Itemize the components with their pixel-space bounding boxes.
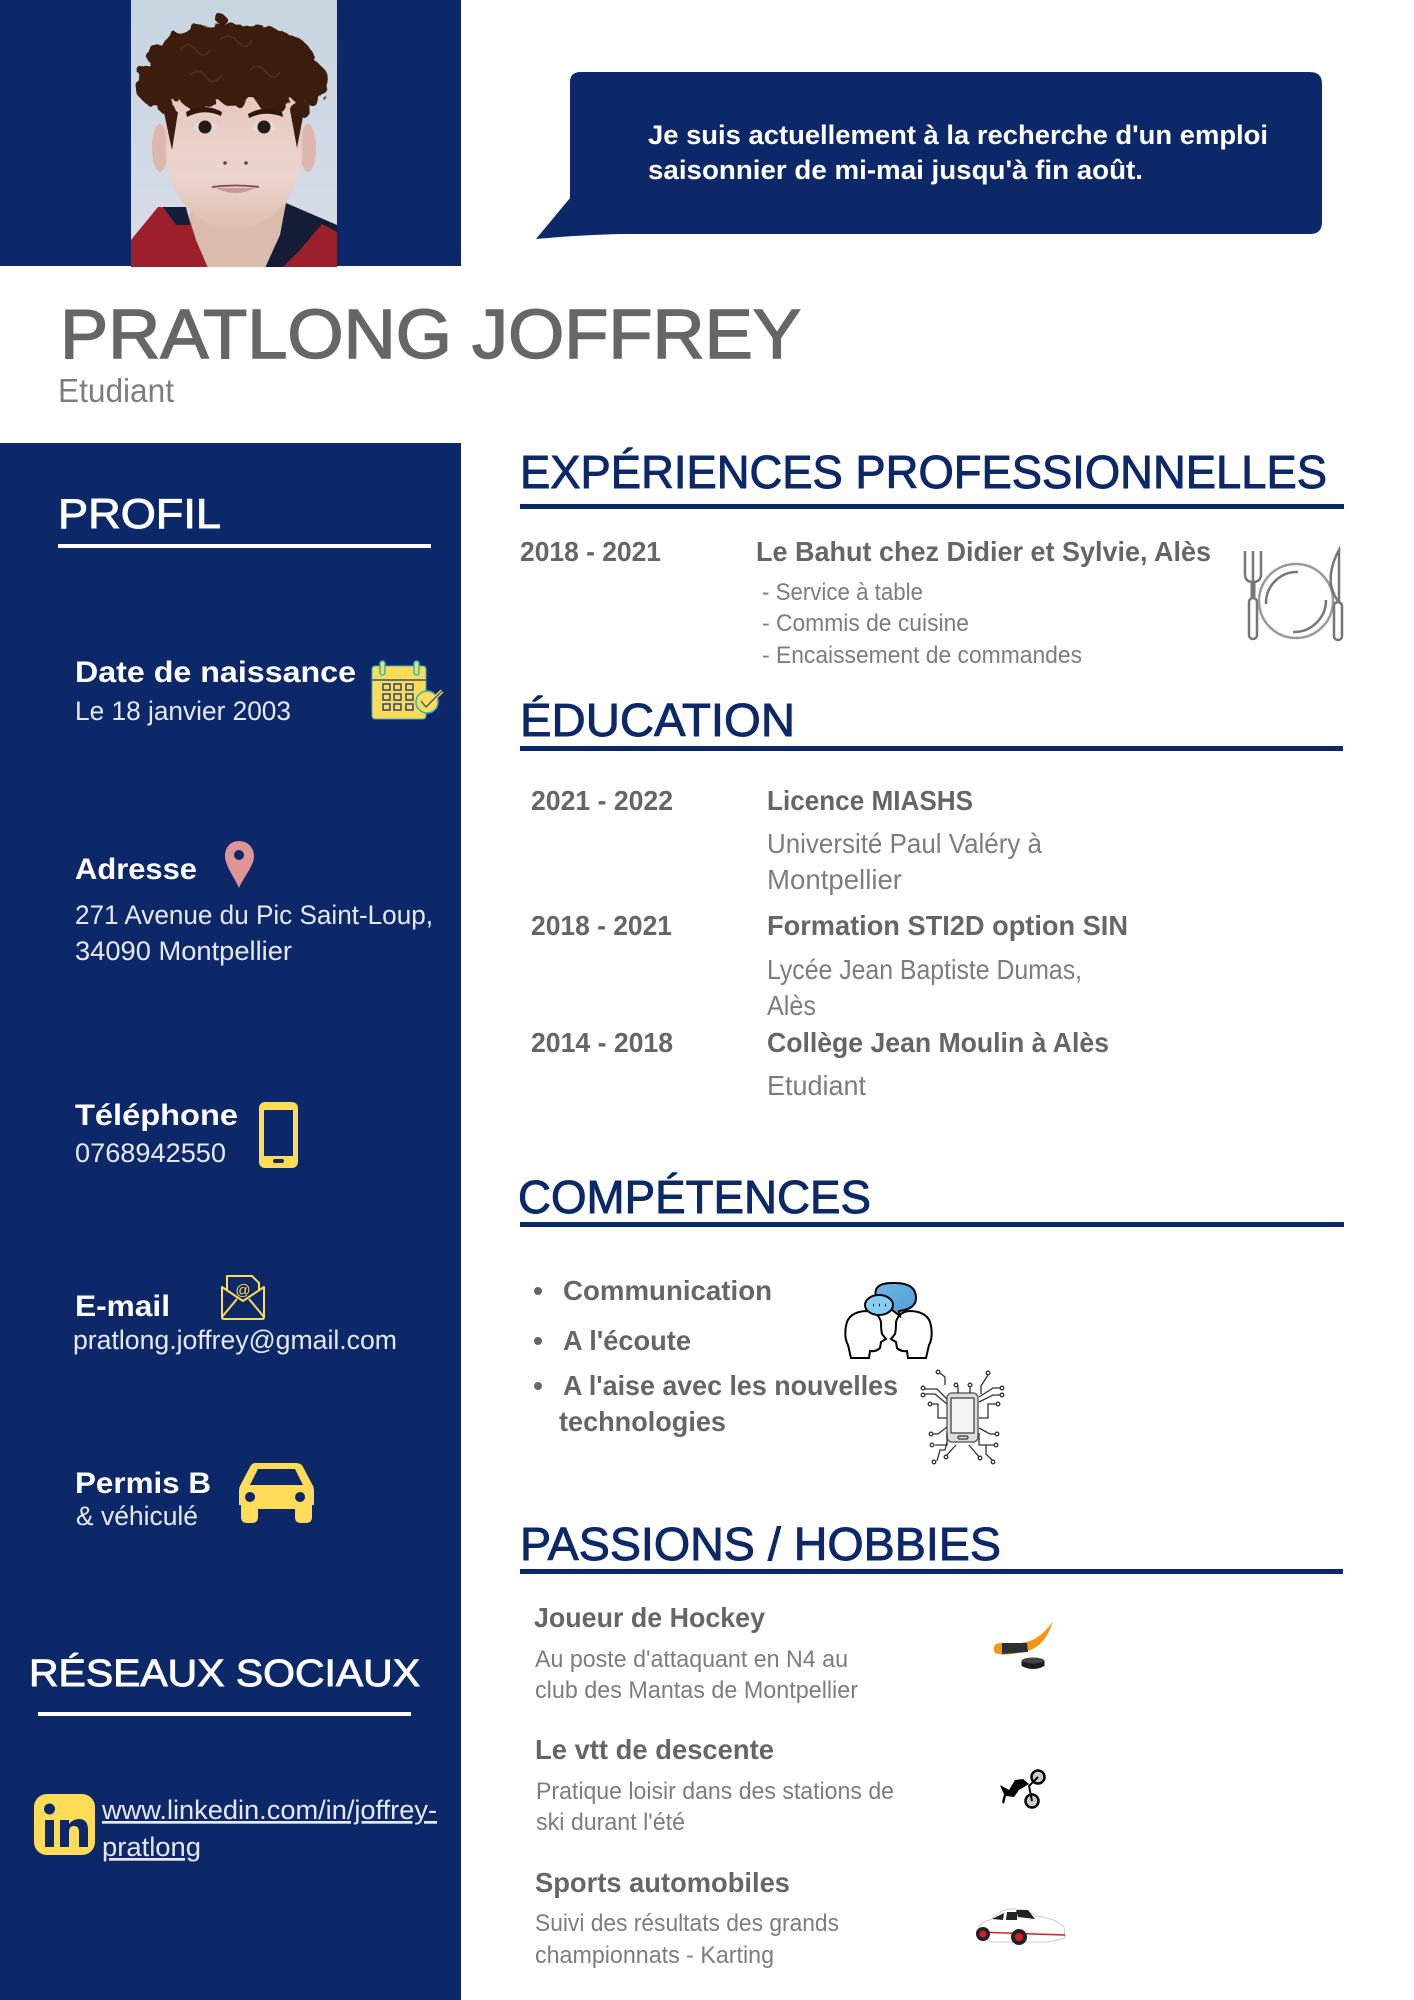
skills list: technologies — [559, 1406, 726, 1437]
skills list — [534, 1275, 898, 1437]
education entry 2: Formation STI2D option SIN — [767, 910, 1128, 941]
heading: reseaux sociaux — [29, 1652, 420, 1716]
icon: circuit smartphone — [921, 1370, 1004, 1464]
hobby: mountain biking: Pratique loisir dans des stations de — [536, 1778, 894, 1805]
hobby: mountain biking — [535, 1734, 894, 1836]
heading: reseaux sociaux: RÉSEAUX SOCIAUX — [29, 1652, 420, 1695]
hobby: hockey — [534, 1602, 858, 1704]
permit block: Permis B — [75, 1467, 211, 1500]
address block: 34090 Montpellier — [75, 936, 292, 966]
linkedin link text: www.linkedin.com/in/joffrey- — [101, 1795, 437, 1825]
experience entry: Le Bahut chez Didier et Sylvie, Alès — [756, 536, 1211, 567]
hobby: hockey: Joueur de Hockey — [534, 1602, 765, 1633]
education entry 1: 2021 - 2022 — [531, 785, 673, 816]
heading: profil — [58, 490, 431, 548]
icon: talking heads — [845, 1283, 932, 1358]
education entry 2: Alès — [767, 990, 816, 1021]
heading: education — [520, 694, 1343, 751]
icon: plate and cutlery — [1245, 550, 1342, 640]
phone block — [75, 1099, 238, 1168]
education entry 1: Université Paul Valéry à — [767, 828, 1042, 859]
callout: job search speech bubble: saisonnier de mi-mai jusqu'à fin août. — [648, 155, 1143, 185]
heading: profil: PROFIL — [58, 490, 221, 537]
permit block — [75, 1467, 211, 1531]
photo: portrait — [131, 0, 337, 268]
hobby: motorsports: Suivi des résultats des grands — [535, 1910, 839, 1937]
education entry 2: Lycée Jean Baptiste Dumas, — [767, 954, 1082, 985]
education entry 3: Collège Jean Moulin à Alès — [767, 1027, 1109, 1058]
skills list: Communication — [563, 1275, 772, 1306]
linkedin link text: pratlong — [102, 1832, 201, 1862]
heading: competences: COMPÉTENCES — [518, 1171, 871, 1223]
heading: education: ÉDUCATION — [520, 694, 795, 746]
icon: mountain bike rider — [1000, 1770, 1044, 1808]
email block: pratlong.joffrey@gmail.com — [73, 1325, 397, 1355]
title: name: PRATLONG JOFFREY — [60, 295, 801, 373]
hobby: motorsports: championnats - Karting — [535, 1942, 774, 1969]
education entry 3: Etudiant — [767, 1070, 866, 1101]
experience entry: - Commis de cuisine — [762, 610, 969, 637]
skills list: A l'écoute — [563, 1325, 691, 1356]
birth date block: Le 18 janvier 2003 — [75, 696, 291, 726]
phone block: Téléphone — [75, 1099, 238, 1132]
education entry 3 — [531, 1027, 1109, 1101]
experience entry: - Encaissement de commandes — [762, 642, 1082, 669]
experience entry: - Service à table — [762, 579, 923, 606]
address block: 271 Avenue du Pic Saint-Loup, — [75, 900, 433, 930]
experience entry: 2018 - 2021 — [520, 536, 661, 567]
hobby: motorsports: Sports automobiles — [535, 1867, 790, 1898]
icon: envelope — [222, 1276, 264, 1319]
heading: passions hobbies — [520, 1518, 1343, 1574]
education entry 1: Licence MIASHS — [767, 785, 973, 816]
icon: sports car — [976, 1909, 1065, 1945]
education entry 2 — [531, 910, 1128, 1021]
address block — [75, 853, 433, 966]
header band with photo — [0, 0, 461, 268]
hobby: mountain biking: Le vtt de descente — [535, 1734, 774, 1765]
birth date block: Date de naissance — [75, 656, 356, 689]
icon: hockey stick and puck — [994, 1621, 1053, 1669]
email block — [73, 1290, 397, 1355]
icon: map pin — [225, 841, 254, 888]
icon: smartphone — [259, 1102, 298, 1168]
skills list: A l'aise avec les nouvelles — [563, 1370, 898, 1401]
heading: passions hobbies: PASSIONS / HOBBIES — [520, 1518, 1001, 1570]
heading: competences — [518, 1171, 1344, 1227]
icon: calendar — [372, 661, 442, 719]
icon: car — [239, 1463, 314, 1523]
phone block: 0768942550 — [75, 1138, 226, 1168]
birth date block — [75, 656, 356, 726]
hobby: hockey: Au poste d'attaquant en N4 au — [535, 1646, 848, 1673]
hobby: mountain biking: ski durant l'été — [536, 1809, 685, 1836]
email block: E-mail — [75, 1290, 170, 1323]
panel: sidebar profile — [0, 443, 461, 2000]
subtitle: job title: Etudiant — [58, 372, 174, 409]
linkedin link text — [101, 1795, 437, 1862]
hobby: hockey: club des Mantas de Montpellier — [535, 1677, 858, 1704]
education entry 1: Montpellier — [767, 864, 902, 895]
callout: job search speech bubble: Je suis actuellement à la recherche d'un emploi — [648, 120, 1268, 150]
education entry 3: 2014 - 2018 — [531, 1027, 673, 1058]
education entry 1 — [531, 785, 1042, 895]
education entry 2: 2018 - 2021 — [531, 910, 672, 941]
experience entry — [520, 536, 1211, 669]
permit block: & véhiculé — [76, 1501, 198, 1531]
icon: envelope: @ — [235, 1282, 251, 1299]
icon: linkedin — [34, 1794, 95, 1855]
heading: experiences: EXPÉRIENCES PROFESSIONNELLES — [520, 446, 1327, 498]
hobby: motorsports — [535, 1867, 839, 1969]
callout: job search speech bubble — [536, 72, 1322, 239]
address block: Adresse — [75, 853, 197, 886]
